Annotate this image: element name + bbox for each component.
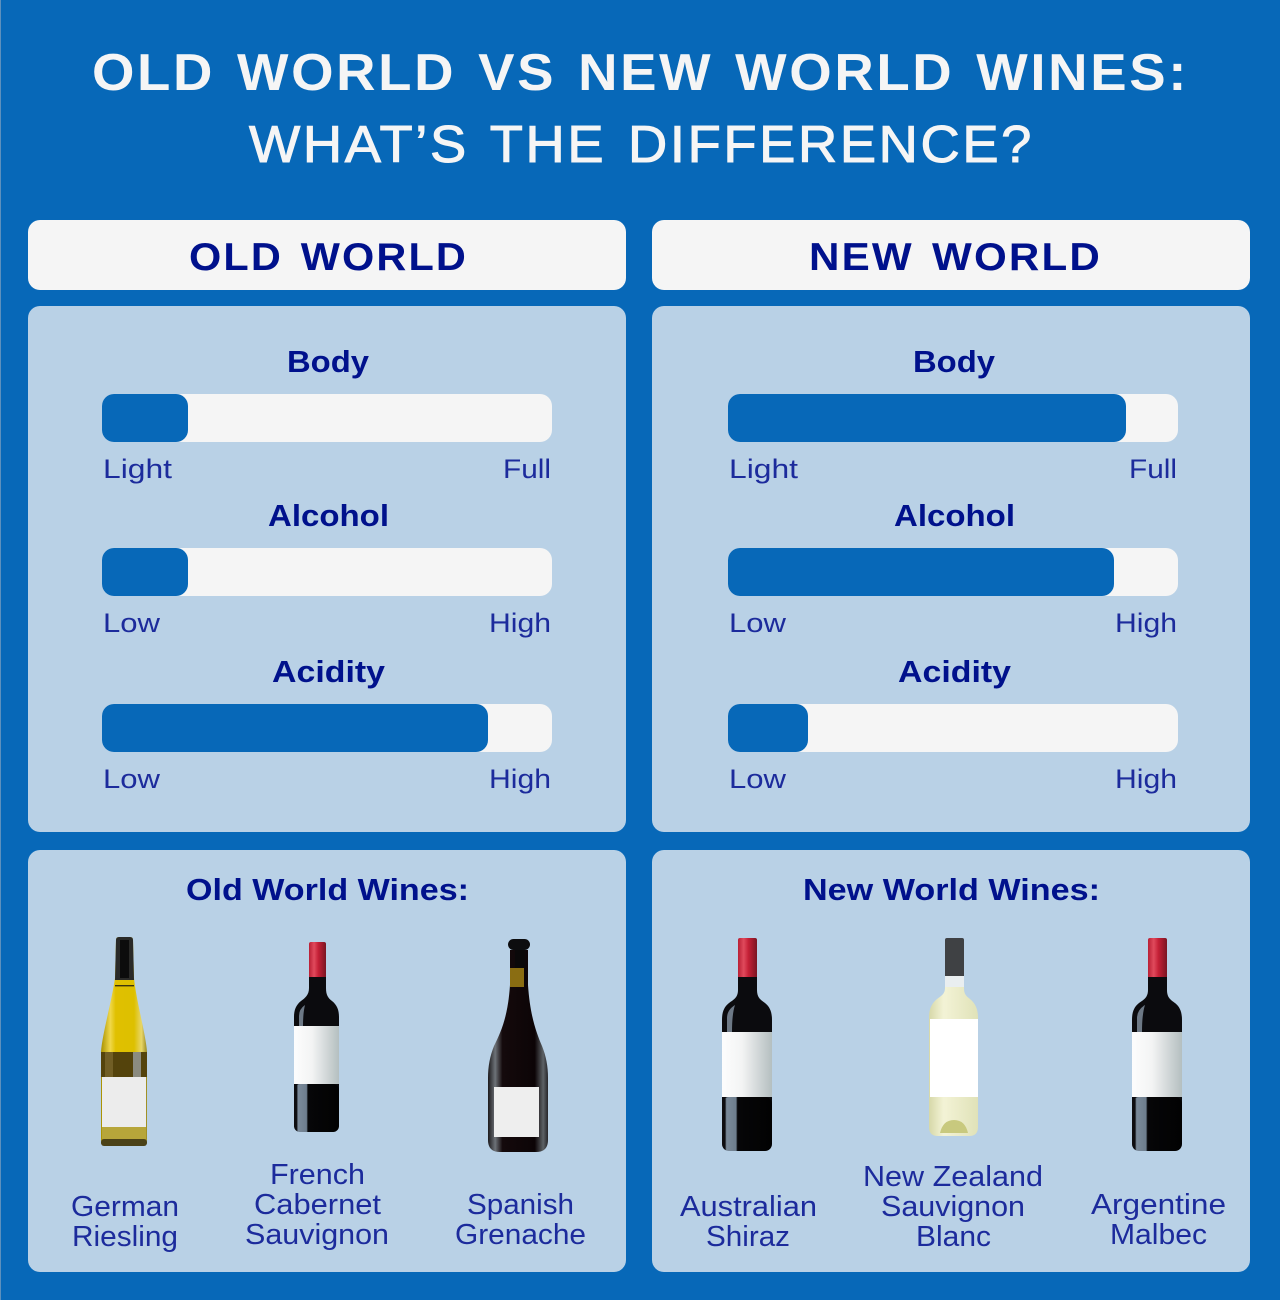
new world wines heading: New World Wines: xyxy=(803,872,1100,907)
australian shiraz label xyxy=(680,1191,817,1253)
icon: spanish grenache bottle xyxy=(488,939,548,1152)
panel: old world wines xyxy=(28,850,626,1272)
panel: new world wines xyxy=(652,850,1250,1272)
argentine malbec label: Argentine xyxy=(1091,1189,1226,1221)
french cabernet sauvignon label: Sauvignon xyxy=(245,1219,389,1251)
french cabernet sauvignon label: Cabernet xyxy=(254,1189,381,1221)
title: WHAT’S THE DIFFERENCE? xyxy=(249,116,1034,174)
old world acidity scale xyxy=(102,654,552,794)
spanish grenache label xyxy=(455,1189,586,1251)
spanish grenache label: Spanish xyxy=(467,1189,574,1221)
french cabernet sauvignon label xyxy=(245,1159,389,1251)
new world acidity scale xyxy=(728,654,1178,794)
german riesling label xyxy=(71,1191,179,1253)
title xyxy=(92,44,1189,174)
old world body scale: Body xyxy=(287,344,370,379)
title: OLD WORLD VS NEW WORLD WINES: xyxy=(92,44,1189,102)
old world alcohol scale: High xyxy=(489,608,551,638)
new world body scale: Full xyxy=(1129,454,1177,484)
new zealand sauvignon blanc label: New Zealand xyxy=(863,1161,1043,1193)
old world acidity scale: High xyxy=(489,764,551,794)
old world alcohol scale: Alcohol xyxy=(268,498,389,533)
panel: old world header: OLD WORLD xyxy=(189,236,468,279)
icon: argentine malbec bottle xyxy=(1132,938,1182,1151)
german riesling label: Riesling xyxy=(72,1221,178,1253)
new world alcohol scale: High xyxy=(1115,608,1177,638)
new world body scale xyxy=(728,344,1178,484)
new zealand sauvignon blanc label: Sauvignon xyxy=(881,1191,1025,1223)
argentine malbec label xyxy=(1091,1189,1226,1251)
new world body scale: Body xyxy=(913,344,996,379)
old world body scale: Light xyxy=(103,454,173,484)
icon: french cabernet bottle xyxy=(294,942,339,1132)
old world wines heading: Old World Wines: xyxy=(186,872,469,907)
old world acidity scale: Low xyxy=(103,764,161,794)
panel: new world header xyxy=(652,220,1250,290)
australian shiraz label: Australian xyxy=(680,1191,817,1223)
old world body scale: Full xyxy=(503,454,551,484)
icon: new zealand sauvignon blanc bottle xyxy=(929,938,978,1136)
australian shiraz label: Shiraz xyxy=(706,1221,790,1253)
new world alcohol scale xyxy=(728,498,1178,638)
old world alcohol scale xyxy=(102,498,552,638)
german riesling label: German xyxy=(71,1191,179,1223)
old world acidity scale: Acidity xyxy=(272,654,386,689)
new world acidity scale: Low xyxy=(729,764,787,794)
panel: old world characteristics xyxy=(28,306,626,832)
panel: new world header: NEW WORLD xyxy=(809,236,1102,279)
new zealand sauvignon blanc label xyxy=(863,1161,1043,1253)
new zealand sauvignon blanc label: Blanc xyxy=(916,1221,991,1253)
new world body scale: Light xyxy=(729,454,799,484)
panel: new world characteristics xyxy=(652,306,1250,832)
new world acidity scale: High xyxy=(1115,764,1177,794)
icon: german riesling bottle xyxy=(101,937,147,1146)
old world body scale xyxy=(102,344,552,484)
icon: australian shiraz bottle xyxy=(722,938,772,1151)
old world alcohol scale: Low xyxy=(103,608,161,638)
new world acidity scale: Acidity xyxy=(898,654,1012,689)
new world alcohol scale: Low xyxy=(729,608,787,638)
new world alcohol scale: Alcohol xyxy=(894,498,1015,533)
argentine malbec label: Malbec xyxy=(1110,1219,1207,1251)
french cabernet sauvignon label: French xyxy=(270,1159,365,1191)
spanish grenache label: Grenache xyxy=(455,1219,586,1251)
panel: old world header xyxy=(28,220,626,290)
